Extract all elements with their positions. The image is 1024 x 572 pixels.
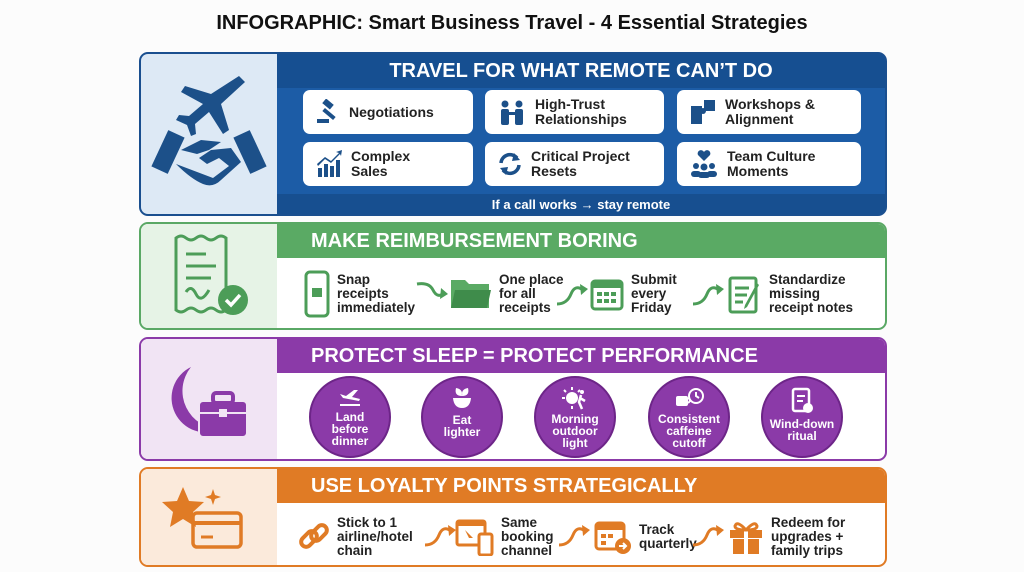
card: critical project [485, 142, 664, 186]
step: redeem: Redeem for [771, 515, 845, 530]
arrow [416, 282, 448, 299]
circle: land before dinner [309, 376, 391, 458]
circle: morning light [534, 376, 616, 458]
circle: land before dinner: Land [336, 410, 364, 424]
step: redeem: upgrades + [771, 529, 843, 544]
heading: TRAVEL FOR WHAT REMOTE CAN’T DO [389, 60, 773, 82]
footer note [277, 194, 885, 216]
circle: eat lighter: lighter [444, 425, 480, 439]
card: high-trust [485, 90, 664, 134]
circle: eat lighter: Eat [453, 413, 471, 427]
card: complex sales: Complex [351, 148, 410, 164]
step: redeem: family trips [771, 543, 843, 558]
step: standardize [728, 272, 853, 315]
card: complex sales [303, 142, 473, 186]
circle: caffeine cutoff: caffeine [666, 424, 712, 438]
step: stick to 1: airline/hotel [337, 529, 413, 544]
step: same channel: channel [501, 543, 552, 558]
heading: USE LOYALTY POINTS STRATEGICALLY [311, 474, 697, 496]
step: submit friday [590, 272, 677, 315]
circle: wind-down: Wind-down [770, 417, 834, 431]
icon: plane and handshake [141, 54, 277, 214]
card: high-trust: High-Trust [535, 96, 605, 112]
panel: reimbursement [139, 222, 887, 330]
step: one place: One place [499, 272, 564, 287]
circle: land before dinner: dinner [332, 434, 368, 448]
icon: moon and briefcase [141, 339, 277, 459]
circle: caffeine cutoff: Consistent [658, 412, 720, 426]
heading [277, 469, 885, 503]
step: same channel: Same [501, 515, 537, 530]
circle: wind-down: ritual [787, 429, 817, 443]
step: same channel: booking [501, 529, 554, 544]
step: one place: receipts [499, 300, 551, 315]
step: submit friday: every [631, 286, 666, 301]
card: critical project: Critical Project [531, 148, 630, 164]
step: snap receipts [304, 270, 415, 318]
panel: loyalty [139, 467, 887, 567]
heading [277, 339, 885, 373]
card: negotiations [303, 90, 473, 134]
card: complex sales: Sales [351, 163, 388, 179]
step: stick to 1: chain [337, 543, 372, 558]
arrow [693, 284, 724, 306]
circle: morning light: outdoor [552, 424, 598, 438]
card: workshops: Workshops & [725, 96, 815, 112]
footer note: If a call works → stay remote [492, 197, 670, 212]
card: workshops [677, 90, 861, 134]
circle: morning light: Morning [551, 412, 599, 426]
panel: sleep [139, 337, 887, 461]
circle: land before dinner: before [332, 422, 368, 436]
heading: MAKE REIMBURSEMENT BORING [311, 230, 638, 252]
step: one place: for all [499, 286, 536, 301]
step: submit friday: Friday [631, 300, 672, 315]
step: track quarterly: quarterly [639, 536, 697, 551]
heading: PROTECT SLEEP = PROTECT PERFORMANCE [311, 344, 758, 366]
arrow [557, 284, 588, 306]
step: redeem [730, 515, 846, 558]
title: INFOGRAPHIC: Smart Business Travel - 4 Essential Strategies [216, 12, 808, 34]
heading [277, 54, 885, 88]
step: snap receipts: immediately [337, 300, 415, 315]
circle: eat lighter [421, 376, 503, 458]
heading [277, 224, 885, 258]
step: stick to 1 [299, 515, 413, 558]
circle: caffeine cutoff [648, 376, 730, 458]
arrow [559, 525, 590, 546]
step: standardize: missing [769, 286, 820, 301]
circle: caffeine cutoff: cutoff [672, 436, 706, 450]
step: standardize: Standardize [769, 272, 846, 287]
panel: travel [139, 52, 887, 216]
card: workshops: Alignment [725, 111, 793, 127]
step: one place [451, 272, 564, 315]
card: high-trust: Relationships [535, 111, 627, 127]
circle: wind-down [761, 376, 843, 458]
step: same channel [456, 515, 554, 558]
circle: morning light: light [562, 436, 588, 450]
card: negotiations: Negotiations [349, 104, 434, 120]
step: submit friday: Submit [631, 272, 677, 287]
card: team culture: Team Culture [727, 148, 815, 164]
step: stick to 1: Stick to 1 [337, 515, 397, 530]
step: snap receipts: receipts [337, 286, 389, 301]
icon: star and card [141, 469, 277, 565]
card: team culture [677, 142, 861, 186]
step: track quarterly: Track [639, 522, 674, 537]
arrow [425, 525, 456, 546]
step: track quarterly [594, 522, 697, 554]
card: critical project: Resets [531, 163, 577, 179]
step: snap receipts: Snap [337, 272, 370, 287]
step: standardize: receipt notes [769, 300, 853, 315]
arrow [693, 525, 724, 546]
card: team culture: Moments [727, 163, 788, 179]
icon: receipt [141, 224, 277, 328]
steps [304, 270, 853, 318]
